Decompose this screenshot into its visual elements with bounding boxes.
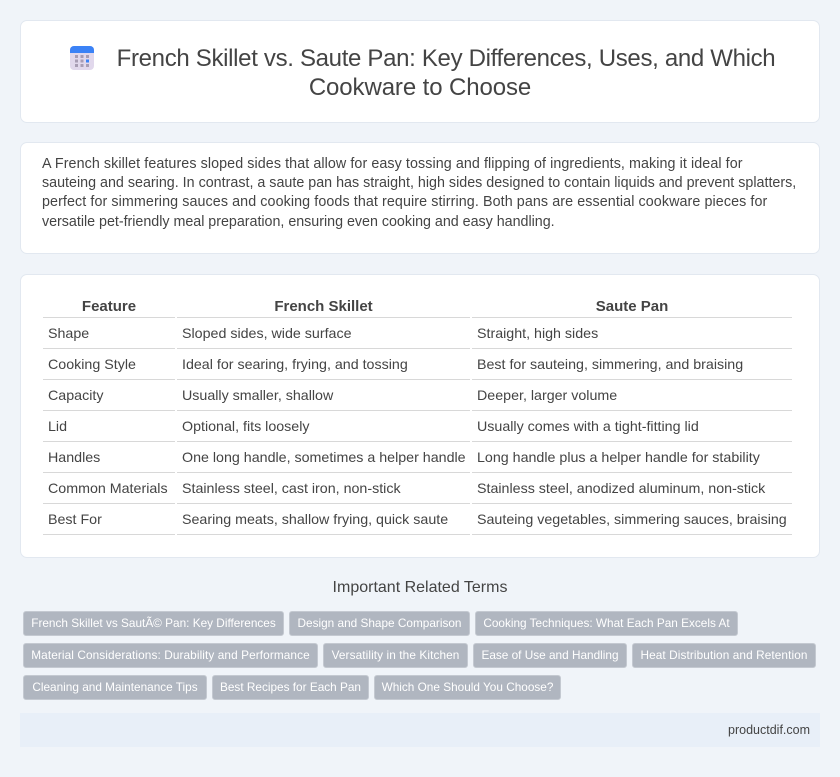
table header (43, 298, 792, 318)
table rows (43, 326, 792, 535)
related term tags: Cooking Techniques: What Each Pan Excels At (483, 616, 730, 630)
related term tags: Best Recipes for Each Pan (220, 680, 361, 694)
table header: French Skillet (274, 298, 373, 315)
table rows: Best for sauteing, simmering, and braising (477, 357, 743, 373)
footer (20, 713, 820, 747)
table rows: One long handle, sometimes a helper handle (182, 450, 466, 466)
icon: calendar (70, 46, 94, 70)
related term tags: Material Considerations: Durability and Performance (31, 648, 310, 662)
table: comparison (43, 298, 792, 535)
text block: description: sauteing and searing. In contrast, a saute pan has straight, high sides designed to contain liquids and prevent splatters, (42, 175, 796, 191)
related term tags: Design and Shape Comparison (298, 616, 461, 630)
table rows: Deeper, larger volume (477, 388, 617, 404)
table rows: Ideal for searing, frying, and tossing (182, 357, 408, 373)
related term tags: Heat Distribution and Retention (640, 648, 808, 662)
table rows: Best For (48, 512, 102, 528)
panel: description (20, 142, 820, 254)
table rows: Stainless steel, anodized aluminum, non-stick (477, 481, 765, 497)
title: French Skillet vs. Saute Pan: Key Differences, Uses, and Which (117, 45, 775, 72)
table rows: Searing meats, shallow frying, quick saute (182, 512, 448, 528)
table rows: Cooking Style (48, 357, 136, 373)
table rows: Usually comes with a tight-fitting lid (477, 419, 699, 435)
related term tags: French Skillet vs SautÃ© Pan: Key Differences (31, 616, 276, 630)
related term tags: Versatility in the Kitchen (332, 648, 459, 662)
table rows: Stainless steel, cast iron, non-stick (182, 481, 401, 497)
table header: Feature (82, 298, 136, 315)
table rows: Long handle plus a helper handle for stability (477, 450, 760, 466)
related term tags: Cleaning and Maintenance Tips (32, 680, 198, 694)
table rows: Handles (48, 450, 100, 466)
table rows: Common Materials (48, 481, 168, 497)
table rows: Lid (48, 419, 67, 435)
related term tags (23, 611, 816, 700)
text block: description: versatile pet-friendly meal preparation, ensuring even cooking and easy handling. (42, 214, 555, 230)
table rows: Straight, high sides (477, 326, 598, 342)
heading: related terms: Important Related Terms (333, 579, 507, 596)
panel: comparison table (20, 274, 820, 558)
text block: description: A French skillet features sloped sides that allow for easy tossing and flipping of ingredients, making it ideal for (42, 156, 743, 172)
footer source text: productdif.com (728, 723, 810, 737)
text block: description (42, 156, 796, 230)
table rows: Sauteing vegetables, simmering sauces, braising (477, 512, 787, 528)
table header: Saute Pan (596, 298, 668, 315)
table rows: Optional, fits loosely (182, 419, 310, 435)
title (117, 45, 775, 101)
title: Cookware to Choose (309, 74, 531, 101)
table rows: Capacity (48, 388, 103, 404)
table rows: Sloped sides, wide surface (182, 326, 352, 342)
text block: description: perfect for simmering sauces and cooking foods that require stirring. Both pans are essential cookware pieces for (42, 194, 767, 210)
header panel (20, 20, 820, 123)
table rows: Shape (48, 326, 89, 342)
related term tags: Which One Should You Choose? (382, 680, 553, 694)
related term tags: Ease of Use and Handling (481, 648, 619, 662)
table rows: Usually smaller, shallow (182, 388, 333, 404)
